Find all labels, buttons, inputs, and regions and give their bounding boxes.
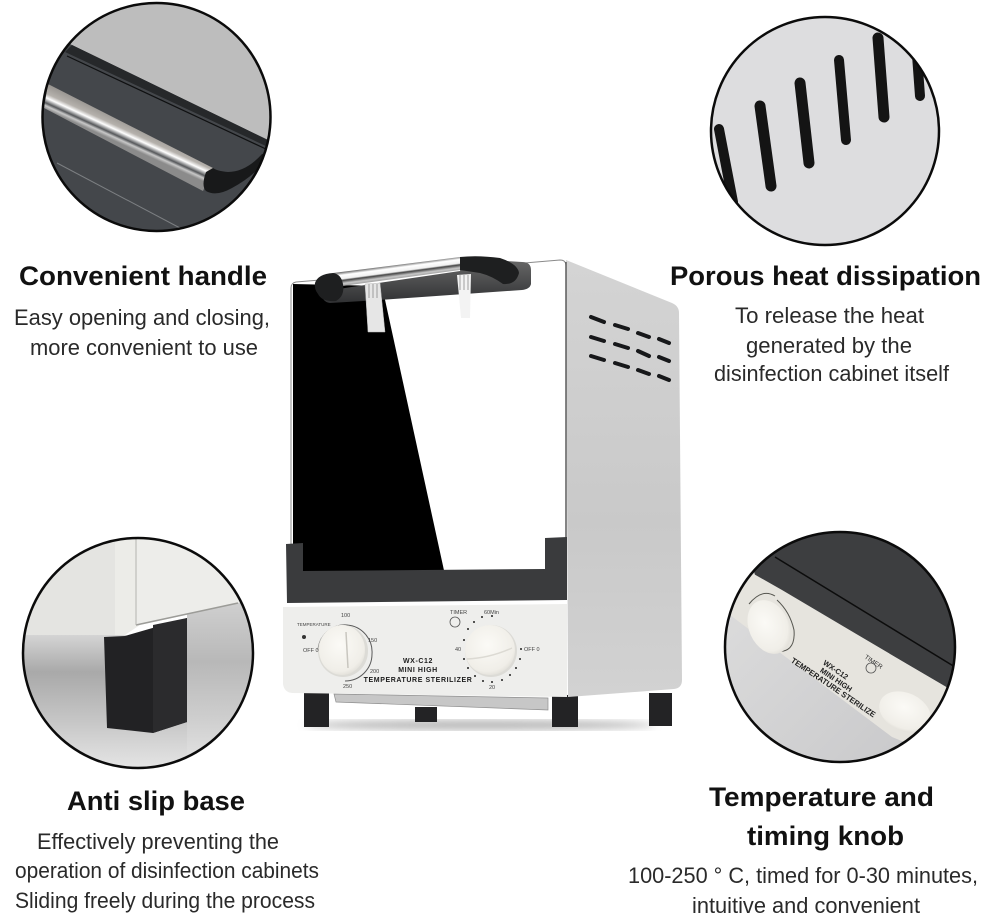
door dark reflection — [293, 284, 445, 575]
text: convenient handle description: Easy opening and closing, — [14, 305, 270, 330]
text: anti slip description: Effectively preventing the — [37, 829, 279, 854]
text: knob description: 100-250 ° C, timed for 0-30 minutes, — [628, 863, 978, 888]
rear tray — [334, 694, 548, 710]
handle — [315, 256, 531, 332]
heading: temperature and timing knob — [709, 782, 934, 851]
timer knob: 60Min — [484, 610, 499, 616]
feet — [304, 693, 672, 727]
timer knob: OFF 0 — [524, 647, 540, 653]
product: sterilizer cabinet — [283, 256, 682, 730]
model label: TEMPERATURE STERILIZER — [364, 677, 472, 684]
text: heat dissipation description — [714, 303, 950, 386]
temperature knob: 200 — [370, 669, 379, 675]
timer knob — [450, 610, 540, 691]
text: convenient handle description: more convenient to use — [30, 335, 258, 360]
temperature knob: 250 — [343, 684, 352, 690]
timer knob: 20 — [489, 685, 495, 691]
detail circle: heat dissipation slots — [705, 10, 945, 250]
heading: anti slip base: Anti slip base — [67, 786, 245, 816]
door glass — [291, 260, 566, 580]
temperature knob: 100 — [341, 613, 350, 619]
heading: convenient handle: Convenient handle — [19, 261, 267, 291]
heading: porous heat dissipation: Porous heat dissipation — [670, 261, 981, 291]
model label: MINI HIGH — [398, 667, 438, 674]
knob panel label: TEMPERATURE STERILIZE — [789, 656, 878, 720]
knob panel label: WX-C12 — [821, 658, 850, 682]
door frame bracket — [286, 537, 567, 603]
detail circle: convenient handle — [40, 0, 280, 235]
text: heat dissipation description: disinfection cabinet itself — [714, 361, 950, 386]
heading: temperature and timing knob: timing knob — [747, 821, 904, 851]
handle straps — [365, 283, 385, 332]
temperature knob: 150 — [368, 638, 377, 644]
text: convenient handle description — [14, 305, 270, 360]
text: anti slip description — [15, 829, 319, 913]
text: anti slip description: Sliding freely during the process — [15, 888, 315, 913]
side panel — [566, 260, 682, 697]
temperature knob: OFF 0 — [303, 648, 319, 654]
side vents — [591, 317, 669, 380]
floor shadow — [305, 720, 655, 730]
control panel — [283, 604, 567, 697]
temperature knob — [297, 613, 379, 690]
timer knob: 40 — [455, 647, 461, 653]
knob panel label: MINI HIGH — [818, 666, 854, 694]
text: heat dissipation description: To release the heat — [735, 303, 924, 328]
detail circle: anti slip base — [20, 535, 260, 770]
text: heat dissipation description: generated by the — [746, 333, 912, 358]
heading: temperature and timing knob: Temperature and — [709, 782, 934, 812]
detail circle: temperature and timing knobs — [724, 530, 956, 764]
timer knob: TIMER — [450, 610, 467, 616]
model label — [364, 658, 472, 684]
timer label: TIMER — [863, 654, 884, 671]
model label: WX-C12 — [403, 658, 433, 665]
text: knob description — [628, 863, 978, 916]
temperature knob: TEMPERATURE — [297, 622, 331, 627]
text: anti slip description: operation of disinfection cabinets — [15, 858, 319, 883]
